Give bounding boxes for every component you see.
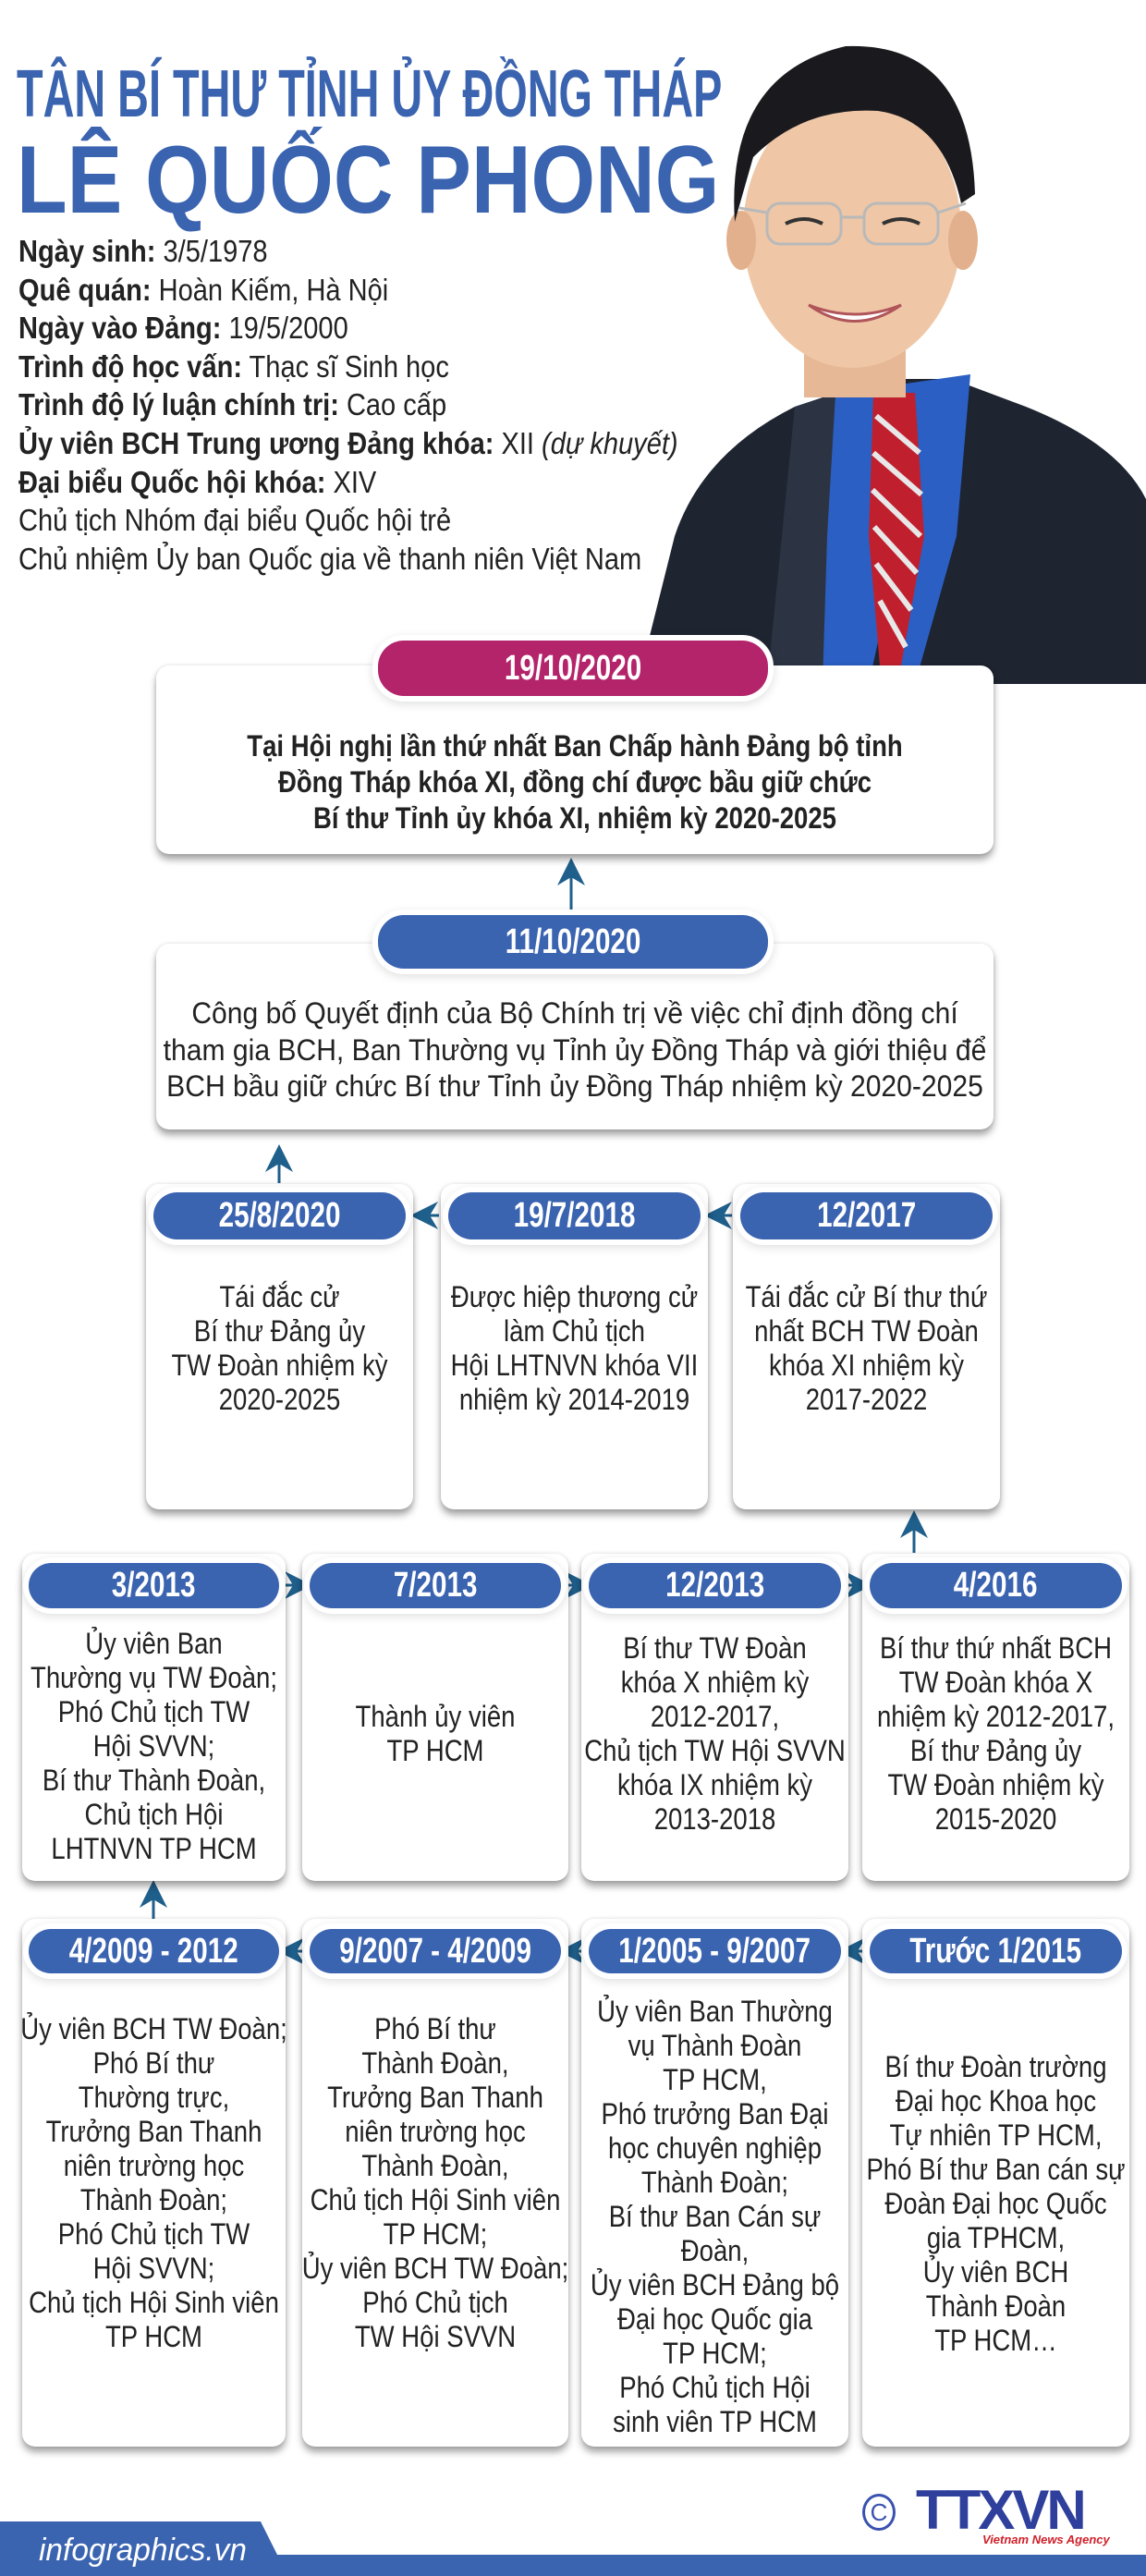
card: Trước 1/2015: Đoàn Đại học Quốc — [884, 2187, 1107, 2220]
card: 12/2017: khóa XI nhiệm kỳ — [769, 1349, 964, 1382]
card: 12/2013: khóa X nhiệm kỳ — [621, 1666, 809, 1699]
card: 4/2016: TW Đoàn nhiệm kỳ — [887, 1768, 1103, 1801]
card: 11/10/2020: Công bố Quyết định của Bộ Chính trị về việc chỉ định đồng chí — [191, 996, 958, 1030]
info list: Chủ tịch Nhóm đại biểu Quốc hội trẻ — [18, 503, 451, 537]
card: 4/2009 - 2012: Phó Bí thư — [93, 2046, 214, 2080]
card: 9/2007 - 4/2009: Phó Bí thư — [374, 2012, 496, 2045]
card: 1/2005 - 9/2007: Thành Đoàn; — [641, 2166, 788, 2199]
card: 1/2005 - 9/2007: Đoàn, — [681, 2234, 749, 2267]
card: 9/2007 - 4/2009: Phó Chủ tịch — [362, 2286, 508, 2319]
pill: 19/7/2018 — [448, 1192, 701, 1239]
card: 4/2009 - 2012: Phó Chủ tịch TW — [58, 2217, 250, 2251]
card: 25/8/2020: Bí thư Đảng ủy — [194, 1314, 365, 1348]
pill: 4/2009 - 2012 — [29, 1929, 279, 1973]
card: Trước 1/2015: TP HCM… — [934, 2324, 1057, 2357]
card: 19/10/2020: Bí thư Tỉnh ủy khóa XI, nhiệm kỳ 2020-2025 — [313, 801, 836, 835]
card: 4/2009 - 2012: niên trường học — [64, 2149, 244, 2182]
pill: 19/7/2018: 19/7/2018 — [514, 1196, 635, 1235]
logo: TTXVN: Vietnam News Agency — [982, 2533, 1110, 2546]
pill: 11/10/2020 — [378, 915, 768, 969]
card: 4/2009 - 2012 — [22, 1919, 286, 2447]
card: 3/2013: Phó Chủ tịch TW — [58, 1695, 250, 1728]
card: 12/2013: 2013-2018 — [654, 1802, 775, 1836]
card: 3/2013: Chủ tịch Hội — [85, 1798, 223, 1831]
card: 12/2013 — [581, 1554, 848, 1881]
card: 4/2016: nhiệm kỳ 2012-2017, — [877, 1700, 1115, 1733]
card: 19/7/2018: Được hiệp thương cử — [451, 1280, 698, 1313]
card: 3/2013: Hội SVVN; — [93, 1729, 214, 1763]
pill: 9/2007 - 4/2009: 9/2007 - 4/2009 — [339, 1932, 531, 1971]
card: Trước 1/2015 — [862, 1919, 1129, 2447]
card: 12/2017: Tái đắc cử Bí thư thứ — [746, 1280, 987, 1313]
title: LÊ QUỐC PHONG — [17, 127, 719, 234]
card: 1/2005 - 9/2007: Bí thư Ban Cán sự — [609, 2200, 821, 2233]
card: 12/2017: 2017-2022 — [806, 1383, 927, 1416]
info list: Ngày sinh: 3/5/1978 — [18, 234, 268, 268]
card: 12/2017: nhất BCH TW Đoàn — [754, 1314, 979, 1348]
pill: 19/10/2020: 19/10/2020 — [505, 649, 641, 688]
info list: Trình độ học vấn: Thạc sĩ Sinh học — [18, 349, 449, 384]
info list — [18, 234, 678, 576]
logo: TTXVN — [862, 2479, 1111, 2546]
pill: Trước 1/2015: Trước 1/2015 — [910, 1932, 1081, 1971]
card: 9/2007 - 4/2009: Chủ tịch Hội Sinh viên — [311, 2183, 560, 2216]
pill: 25/8/2020 — [153, 1192, 406, 1239]
card: 19/10/2020: Tại Hội nghị lần thứ nhất Ban Chấp hành Đảng bộ tỉnh — [247, 729, 903, 763]
info list: Đại biểu Quốc hội khóa: XIV — [18, 465, 376, 499]
card: 9/2007 - 4/2009: Trưởng Ban Thanh — [327, 2081, 543, 2114]
card: 4/2016 — [862, 1554, 1129, 1881]
logo: TTXVN: TTXVN — [916, 2479, 1084, 2541]
card: 4/2009 - 2012: Ủy viên BCH TW Đoàn; — [20, 2012, 287, 2045]
card: 1/2005 - 9/2007: TP HCM; — [663, 2337, 767, 2370]
footer band — [0, 2521, 1146, 2576]
card: 3/2013: LHTNVN TP HCM — [51, 1832, 257, 1865]
card: 3/2013: Bí thư Thành Đoàn, — [43, 1764, 265, 1797]
card: 4/2009 - 2012: Hội SVVN; — [93, 2252, 214, 2285]
card: 3/2013: Ủy viên Ban — [85, 1627, 223, 1660]
pill: 19/10/2020 — [378, 641, 768, 696]
pill: 12/2013: 12/2013 — [665, 1566, 764, 1605]
portrait photo — [650, 46, 1146, 684]
logo: TTXVN: C — [871, 2498, 887, 2526]
card: 12/2013: khóa IX nhiệm kỳ — [617, 1768, 812, 1801]
card: 4/2016: TW Đoàn khóa X — [899, 1666, 1092, 1699]
card: 4/2016: 2015-2020 — [935, 1802, 1056, 1836]
card: 12/2013: 2012-2017, — [651, 1700, 779, 1733]
card: 1/2005 - 9/2007: Phó trưởng Ban Đại — [601, 2097, 829, 2130]
card: Trước 1/2015: Phó Bí thư Ban cán sự — [866, 2153, 1126, 2186]
card: 9/2007 - 4/2009: TW Hội SVVN — [355, 2320, 516, 2353]
card: 1/2005 - 9/2007: Đại học Quốc gia — [617, 2302, 812, 2336]
card: 4/2009 - 2012: Thành Đoàn; — [80, 2183, 227, 2216]
pill: 12/2013 — [589, 1563, 841, 1608]
card: 1/2005 - 9/2007: Ủy viên BCH Đảng bộ — [591, 2268, 839, 2301]
card: 25/8/2020 — [146, 1184, 413, 1509]
card: 25/8/2020: 2020-2025 — [219, 1383, 340, 1416]
card: 12/2017 — [733, 1184, 1000, 1509]
footer text: infographics.vn — [39, 2533, 247, 2568]
pill: 25/8/2020: 25/8/2020 — [219, 1196, 340, 1235]
card: 3/2013 — [22, 1554, 286, 1881]
card: 9/2007 - 4/2009: TP HCM; — [384, 2217, 487, 2251]
card: Trước 1/2015: Tự nhiên TP HCM, — [890, 2118, 1102, 2152]
title: TÂN BÍ THƯ TỈNH ỦY ĐỒNG THÁP — [17, 57, 722, 131]
card: 1/2005 - 9/2007: TP HCM, — [663, 2063, 767, 2096]
info list: Trình độ lý luận chính trị: Cao cấp — [18, 387, 446, 421]
card: 4/2016: Bí thư Đảng ủy — [910, 1734, 1081, 1767]
card: 19/7/2018: nhiệm kỳ 2014-2019 — [459, 1383, 689, 1416]
card: 9/2007 - 4/2009: Thành Đoàn, — [361, 2046, 509, 2080]
card: 4/2009 - 2012: TP HCM — [105, 2320, 202, 2353]
card: 7/2013 — [302, 1554, 568, 1881]
card: 1/2005 - 9/2007: sinh viên TP HCM — [613, 2405, 817, 2438]
card: Trước 1/2015: Bí thư Đoàn trường — [885, 2050, 1106, 2083]
pill: 1/2005 - 9/2007 — [589, 1929, 841, 1973]
pill: 12/2017 — [740, 1192, 993, 1239]
card: 9/2007 - 4/2009: Thành Đoàn, — [361, 2149, 509, 2182]
card: 4/2009 - 2012: Thường trực, — [79, 2081, 229, 2114]
card: 11/10/2020: BCH bầu giữ chức Bí thư Tỉnh ủy Đồng Tháp nhiệm kỳ 2020-2025 — [166, 1069, 983, 1103]
card: 1/2005 - 9/2007: vụ Thành Đoàn — [628, 2029, 801, 2062]
card: 25/8/2020: Tái đắc cử — [219, 1280, 340, 1313]
card: 12/2013: Bí thư TW Đoàn — [623, 1631, 807, 1665]
pill: 3/2013: 3/2013 — [112, 1566, 196, 1605]
card: 11/10/2020: tham gia BCH, Ban Thường vụ Tỉnh ủy Đồng Tháp và giới thiệu để — [164, 1033, 986, 1067]
card: 7/2013: Thành ủy viên — [356, 1700, 515, 1733]
card: 4/2009 - 2012: Chủ tịch Hội Sinh viên — [29, 2286, 279, 2319]
card: 19/7/2018 — [441, 1184, 708, 1509]
card: 4/2016: Bí thư thứ nhất BCH — [880, 1631, 1112, 1665]
card: 19/7/2018: làm Chủ tịch — [504, 1314, 645, 1348]
info list: Ngày vào Đảng: 19/5/2000 — [18, 311, 348, 345]
card: 1/2005 - 9/2007: Ủy viên Ban Thường — [597, 1995, 833, 2028]
card: 9/2007 - 4/2009: Ủy viên BCH TW Đoàn; — [302, 2252, 568, 2285]
card: 11/10/2020 — [156, 944, 994, 1129]
card: 19/7/2018: Hội LHTNVN khóa VII — [451, 1349, 698, 1382]
card: 12/2013: Chủ tịch TW Hội SVVN — [584, 1734, 846, 1767]
card: Trước 1/2015: Thành Đoàn — [926, 2289, 1066, 2323]
card: 1/2005 - 9/2007: Phó Chủ tịch Hội — [619, 2371, 811, 2404]
pill: 7/2013: 7/2013 — [394, 1566, 477, 1605]
card: 1/2005 - 9/2007: học chuyên nghiệp — [608, 2131, 822, 2165]
pill: 11/10/2020: 11/10/2020 — [506, 922, 640, 961]
info list: Ủy viên BCH Trung ương Đảng khóa: XII (dự khuyết) — [18, 426, 678, 460]
pill: 12/2017: 12/2017 — [817, 1196, 916, 1235]
card: 25/8/2020: TW Đoàn nhiệm kỳ — [171, 1349, 387, 1382]
card: 19/10/2020 — [156, 665, 994, 854]
info list: Chủ nhiệm Ủy ban Quốc gia về thanh niên Việt Nam — [18, 542, 641, 576]
card: 7/2013: TP HCM — [386, 1734, 483, 1767]
pill: 4/2009 - 2012: 4/2009 - 2012 — [69, 1932, 238, 1971]
title — [17, 56, 722, 234]
card: 3/2013: Thường vụ TW Đoàn; — [30, 1661, 277, 1694]
card: 4/2009 - 2012: Trưởng Ban Thanh — [46, 2115, 262, 2148]
pill: 4/2016 — [870, 1563, 1122, 1608]
card: 9/2007 - 4/2009 — [302, 1919, 568, 2447]
info list: Quê quán: Hoàn Kiếm, Hà Nội — [18, 273, 388, 307]
card: 1/2005 - 9/2007 — [581, 1919, 848, 2447]
card: 9/2007 - 4/2009: niên trường học — [345, 2115, 526, 2148]
pill: Trước 1/2015 — [870, 1929, 1122, 1973]
card: 19/10/2020: Đồng Tháp khóa XI, đồng chí được bầu giữ chức — [278, 765, 872, 799]
card: Trước 1/2015: Ủy viên BCH — [923, 2255, 1068, 2289]
pill: 1/2005 - 9/2007: 1/2005 - 9/2007 — [619, 1932, 811, 1971]
card: Trước 1/2015: Đại học Khoa học — [896, 2084, 1096, 2118]
pill: 3/2013 — [29, 1563, 279, 1608]
pill: 9/2007 - 4/2009 — [310, 1929, 561, 1973]
card: Trước 1/2015: gia TPHCM, — [927, 2221, 1065, 2254]
pill: 7/2013 — [310, 1563, 561, 1608]
pill: 4/2016: 4/2016 — [954, 1566, 1038, 1605]
